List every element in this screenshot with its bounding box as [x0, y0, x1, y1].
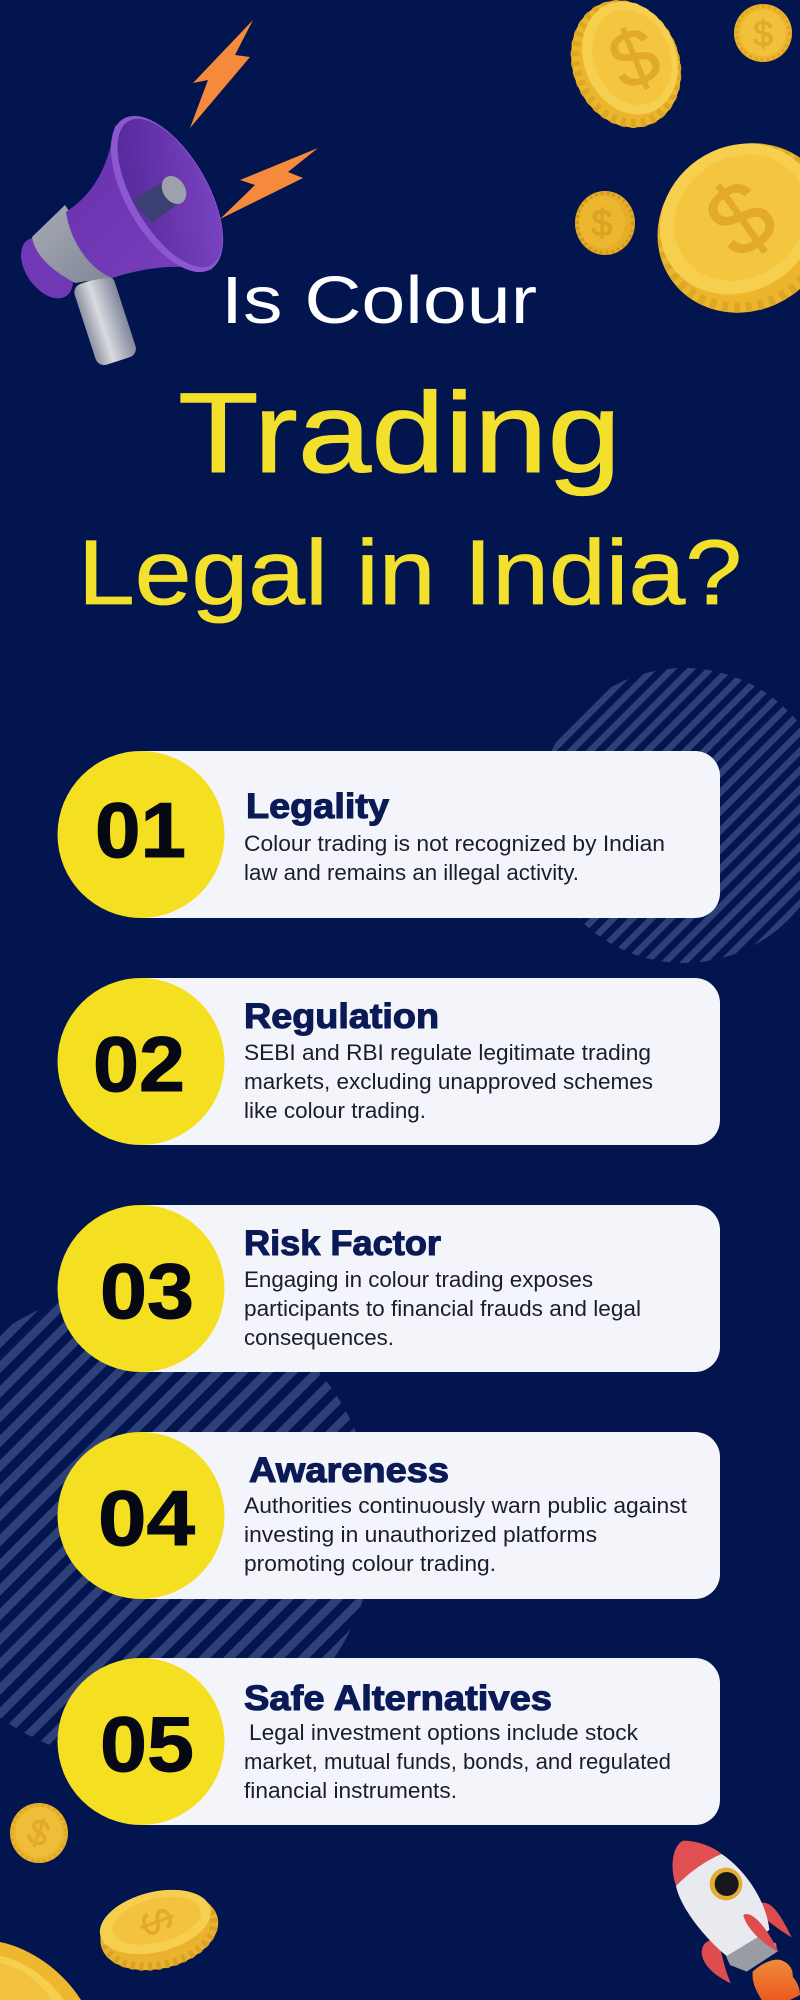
- icon: lightning bolt lower: [220, 148, 318, 219]
- number 05: 05: [100, 1700, 194, 1788]
- description: participants to financial frauds and legal: [244, 1296, 641, 1321]
- heading: Regulation: Regulation: [244, 997, 439, 1036]
- number badge 01: [58, 751, 224, 918]
- card background: [120, 978, 720, 1145]
- description: market, mutual funds, bonds, and regulated: [244, 1749, 671, 1774]
- description: law and remains an illegal activity.: [244, 860, 579, 885]
- icon: coin top centre: [553, 0, 699, 144]
- description: Engaging in colour trading exposes: [244, 1267, 593, 1292]
- panel: 03 Risk Factor: [58, 1205, 720, 1372]
- icon: coin large right: $: [686, 157, 796, 280]
- icon: coin large right: [624, 108, 800, 347]
- icon: coin bottom left tilted: $: [130, 1902, 183, 1941]
- description: Legal investment options include stock: [249, 1720, 639, 1745]
- title: Is Colour: Is Colour: [221, 263, 537, 338]
- description: financial instruments.: [244, 1778, 457, 1803]
- number 02: 02: [93, 1020, 185, 1108]
- icon: coin bottom left small: [10, 1803, 68, 1863]
- icon: coin top right small: $: [753, 13, 773, 54]
- description: investing in unauthorized platforms: [244, 1522, 597, 1547]
- number badge 02: [58, 978, 224, 1145]
- card background: [120, 1658, 720, 1825]
- icon: megaphone: [10, 98, 246, 367]
- icon: coin bottom left tilted: [92, 1879, 226, 1982]
- card background: [120, 1205, 720, 1372]
- number 04: 04: [98, 1474, 195, 1562]
- icon: coin top centre: $: [597, 8, 672, 108]
- card background: [120, 751, 720, 918]
- heading: Awareness: Awareness: [249, 1451, 449, 1490]
- number 01: 01: [95, 786, 186, 874]
- heading: Safe Alternatives: Safe Alternatives: [244, 1679, 552, 1718]
- description: [244, 1040, 653, 1123]
- striped circle top right: [536, 668, 800, 963]
- panel: 01 Legality: [58, 751, 720, 918]
- heading: Legality: Legality: [246, 787, 390, 826]
- description: like colour trading.: [244, 1098, 426, 1123]
- panel: 04 Awareness: [58, 1432, 720, 1599]
- description: [244, 1720, 671, 1803]
- number 03: 03: [100, 1247, 194, 1335]
- number badge 03: [58, 1205, 224, 1372]
- card background: [120, 1432, 720, 1599]
- icon: lightning bolt top: [190, 20, 253, 128]
- description: markets, excluding unapproved schemes: [244, 1069, 653, 1094]
- heading: Risk Factor: Risk Factor: [244, 1224, 441, 1263]
- description: SEBI and RBI regulate legitimate trading: [244, 1040, 651, 1065]
- number badge 04: [58, 1432, 224, 1599]
- panel: 05 Safe Alternatives: [58, 1658, 720, 1825]
- icon: coin middle small: $: [591, 203, 613, 245]
- description: Authorities continuously warn public against: [244, 1493, 687, 1518]
- icon: coin bottom left small: $: [22, 1810, 55, 1855]
- panel: 02 Regulation: [58, 978, 720, 1145]
- description: promoting colour trading.: [244, 1551, 496, 1576]
- icon: coin middle small: [575, 191, 635, 255]
- icon: coin bottom left corner: [0, 1942, 81, 2000]
- striped circle left: [0, 1288, 375, 1762]
- number badge 05: [58, 1658, 224, 1825]
- icon: rocket: [673, 1841, 800, 2000]
- title: Trading: Trading: [178, 370, 621, 497]
- icon: coin top right small: [734, 4, 792, 62]
- description: [244, 1267, 641, 1350]
- description: [244, 1493, 687, 1576]
- description: consequences.: [244, 1325, 394, 1350]
- description: Colour trading is not recognized by Indian: [244, 831, 665, 856]
- description: [244, 831, 665, 885]
- title: Legal in India?: Legal in India?: [78, 522, 742, 624]
